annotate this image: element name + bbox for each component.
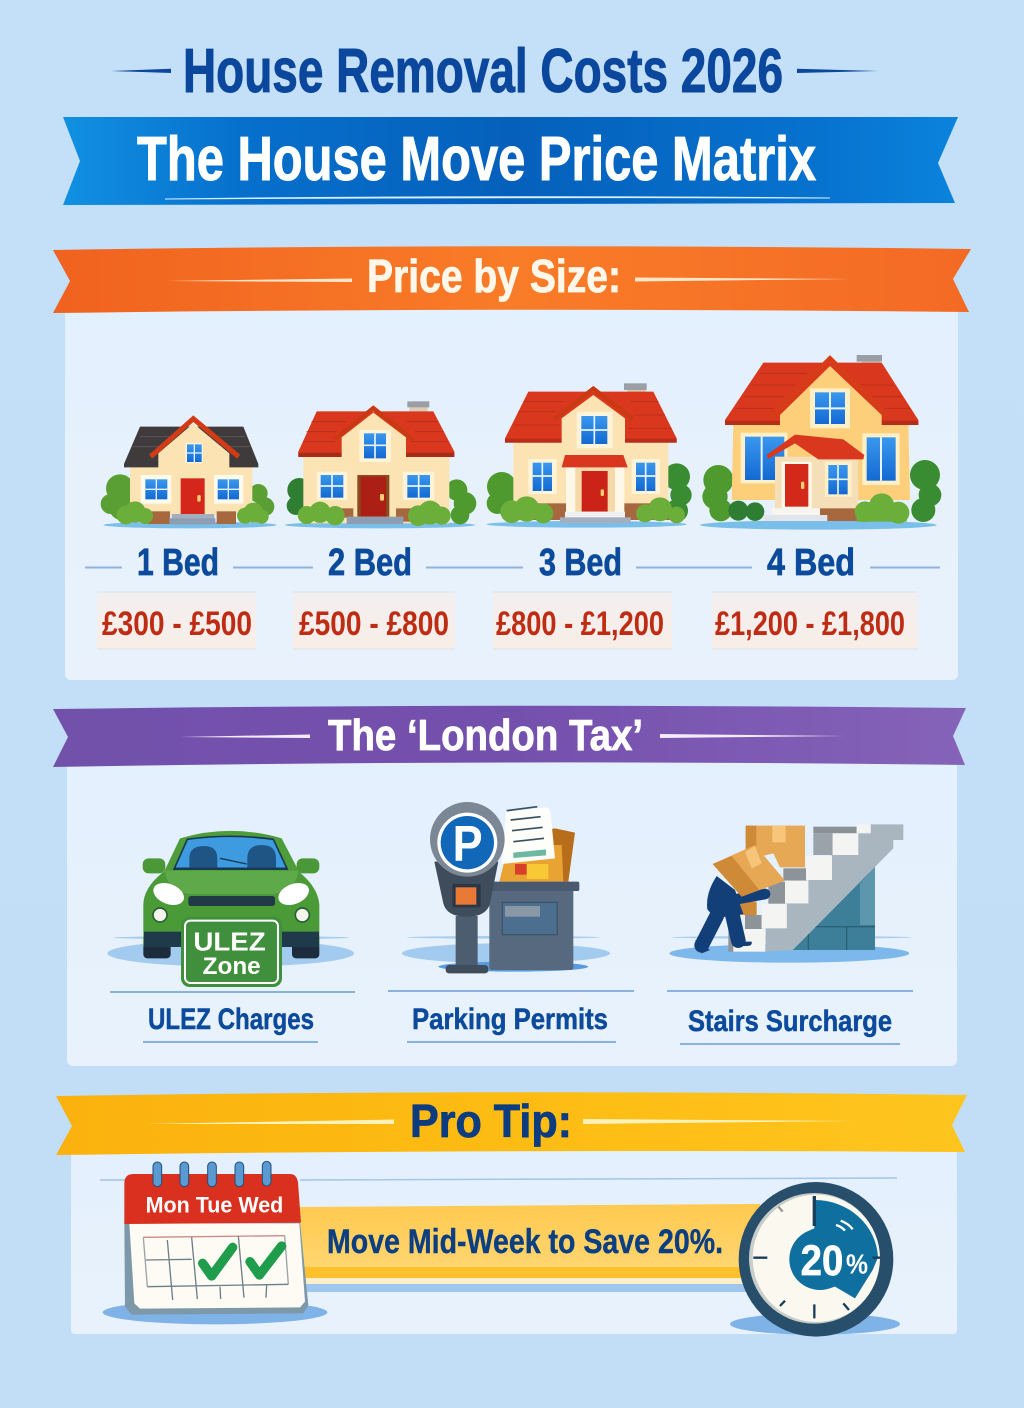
- icon: car with ULEZ sign: ULEZ: [193, 927, 266, 957]
- label: 2 bed: 2 Bed: [328, 542, 412, 584]
- icon: calendar: [103, 1161, 327, 1324]
- heading ribbon: pro tip: [56, 1092, 967, 1155]
- icon: parking meter and bin: [402, 802, 610, 973]
- price box: 4 bed: £1,200 - £1,800: [715, 605, 905, 643]
- price box: 2 bed: £500 - £800: [299, 605, 449, 643]
- price box: 4 bed: [712, 592, 918, 649]
- heading ribbon: pro tip: Pro Tip:: [410, 1095, 572, 1147]
- callout: move mid-week tip: [296, 1204, 760, 1292]
- heading ribbon: london tax: The ‘London Tax’: [328, 711, 643, 760]
- price box: 1 bed: [97, 592, 256, 649]
- label: parking permits: Parking Permits: [412, 1003, 608, 1036]
- icon: car with ULEZ sign: Zone: [203, 953, 261, 980]
- panel: pro tip: [56, 1092, 967, 1337]
- price box: 3 bed: [493, 592, 672, 649]
- icon: 3 bed house: [487, 383, 692, 528]
- icon: parking meter and bin: P: [453, 816, 483, 872]
- icon: 2 bed house: [285, 401, 476, 528]
- heading ribbon: price by size: Price by Size:: [367, 250, 621, 302]
- price box: 1 bed: £300 - £500: [102, 605, 252, 643]
- label: 4 bed: 4 Bed: [767, 542, 855, 584]
- icon: 20% timer: [730, 1182, 900, 1337]
- callout: move mid-week tip: Move Mid-Week to Save 20%.: [327, 1223, 723, 1261]
- heading ribbon: price by size: [53, 246, 971, 313]
- price box: 3 bed: £800 - £1,200: [496, 605, 664, 643]
- label: ulez charges: ULEZ Charges: [148, 1003, 314, 1036]
- icon: calendar: Mon Tue Wed: [146, 1192, 283, 1217]
- subtitle ribbon: [63, 117, 958, 205]
- heading ribbon: london tax: [53, 706, 966, 767]
- icon: 20% timer: %: [846, 1249, 868, 1280]
- icon: 4 bed house: [700, 355, 941, 530]
- subtitle ribbon: The House Move Price Matrix: [137, 125, 816, 194]
- label: 3 bed: 3 Bed: [539, 542, 622, 584]
- label: 1 bed: 1 Bed: [137, 542, 219, 584]
- icon: 1 bed house: [101, 419, 277, 528]
- price box: 2 bed: [293, 592, 455, 649]
- icon: mover carrying boxes up stairs: [669, 824, 912, 963]
- icon: car with ULEZ sign: [107, 831, 354, 987]
- panel: london tax: [53, 706, 966, 1066]
- panel: price by size: [53, 246, 971, 680]
- icon: 20% timer: 20: [801, 1237, 843, 1285]
- title: House Removal Costs 2026: [183, 37, 783, 106]
- label: stairs surcharge: Stairs Surcharge: [688, 1005, 892, 1038]
